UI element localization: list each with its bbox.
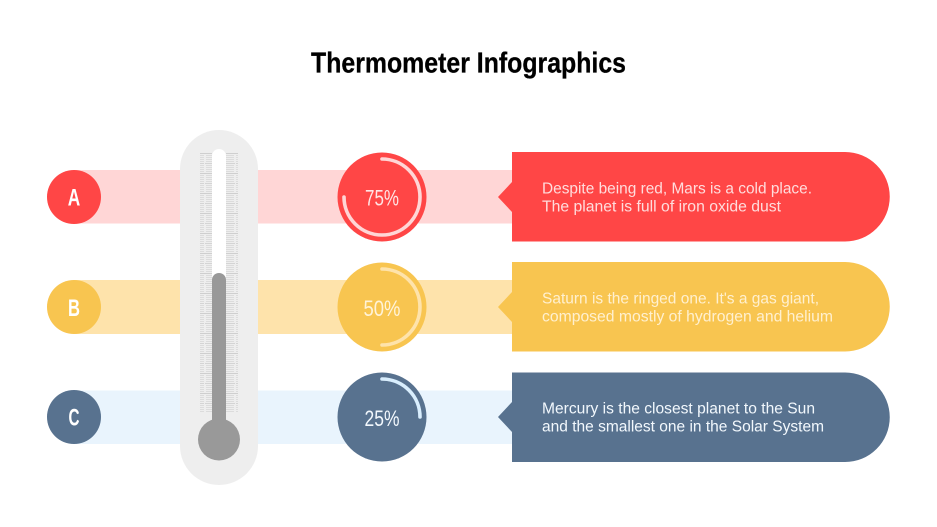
callout: Saturn: composed mostly of hydrogen and helium	[542, 308, 833, 326]
callout: Saturn: Saturn is the ringed one. It's a gas giant,	[542, 290, 819, 307]
gauge: 50%	[338, 262, 426, 352]
thermometer body	[180, 130, 258, 485]
callout: Saturn	[498, 262, 890, 352]
callout: Mercury: Mercury is the closest planet to the Sun	[542, 400, 815, 417]
row band: B	[74, 280, 514, 334]
callout: Mars	[498, 152, 890, 242]
empty tube	[212, 149, 226, 284]
badge: A	[47, 170, 101, 224]
callout: Mars: The planet is full of iron oxide dust	[542, 198, 782, 216]
scale ticks	[200, 153, 238, 413]
badge: B	[47, 280, 101, 334]
callout: Mercury	[498, 372, 890, 462]
badge: A: A	[68, 184, 80, 212]
row band: A	[74, 170, 514, 224]
gauge: 25%	[338, 372, 426, 462]
badge: B: B	[68, 295, 80, 322]
callout: Mercury: and the smallest one in the Solar System	[542, 418, 824, 436]
gauge: 25%: 25%	[364, 406, 400, 431]
thermometer	[180, 130, 258, 485]
badge: C	[47, 390, 101, 444]
title: Thermometer Infographics	[311, 48, 626, 80]
mercury column	[212, 273, 226, 433]
badge: C: C	[68, 404, 80, 432]
row band: C	[74, 390, 514, 444]
bulb	[198, 418, 240, 460]
gauge: 50%: 50%	[364, 296, 400, 321]
callout: Mars: Despite being red, Mars is a cold place.	[542, 180, 812, 197]
gauge: 75%	[338, 152, 426, 242]
gauge: 75%: 75%	[365, 186, 399, 210]
